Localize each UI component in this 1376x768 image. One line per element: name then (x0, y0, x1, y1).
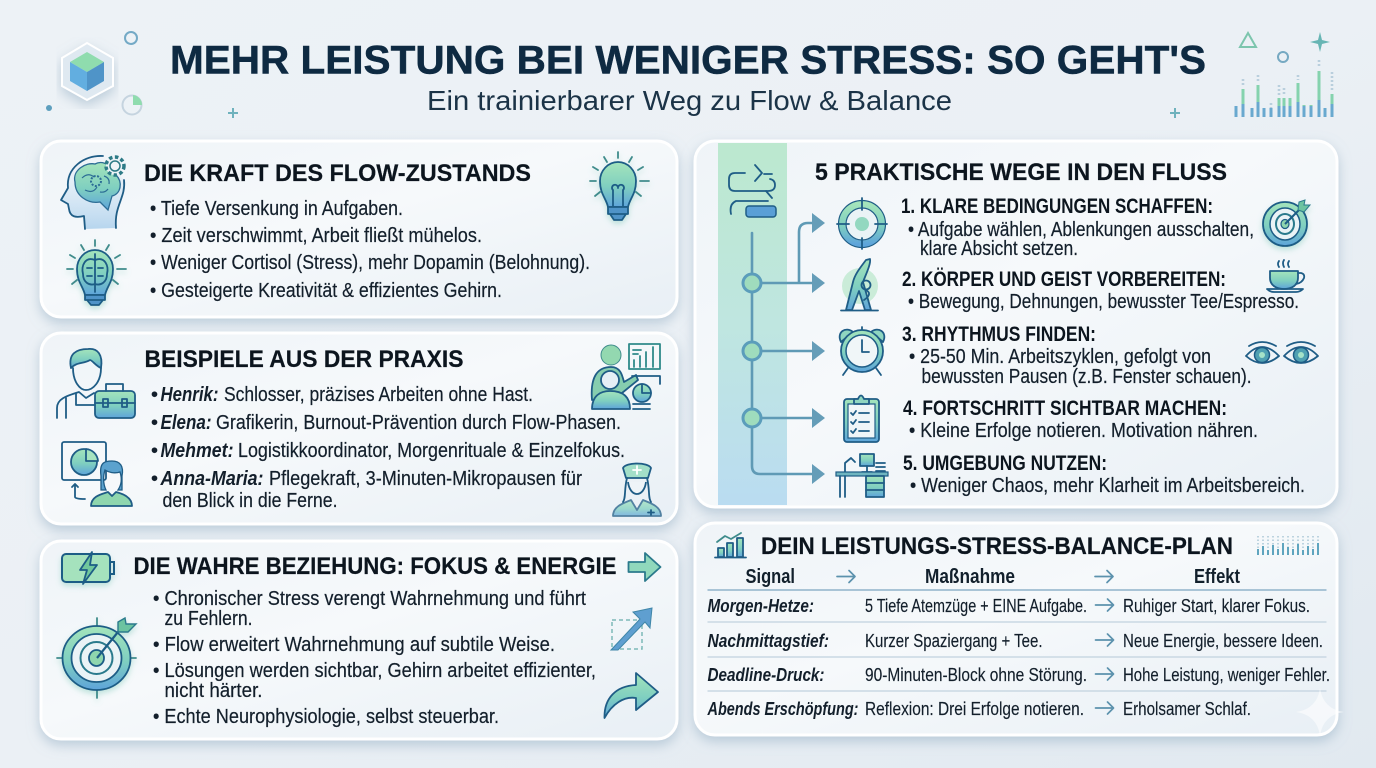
bullet list: • Gesteigerte Kreativität & effizientes Gehirn. (150, 280, 502, 302)
heading: 5 PRAKTISCHE WEGE IN DEN FLUSS (815, 159, 1227, 186)
step 4 (844, 396, 1258, 442)
examples list: • (151, 440, 158, 462)
heading: DIE WAHRE BEZIEHUNG: FOKUS & ENERGIE (134, 553, 616, 580)
bullet list: • Weniger Cortisol (Stress), mehr Dopamin (Belohnung). (150, 252, 590, 274)
icon: curved arrow (604, 673, 658, 718)
heading: DEIN LEISTUNGS-STRESS-BALANCE-PLAN (761, 533, 1233, 560)
panel: Die wahre Beziehung (41, 541, 677, 739)
icon: teacher with charts (592, 344, 660, 409)
row: Deadline-Druck: 90-Minuten-Block ohne Störung. (865, 664, 1087, 685)
subtitle: Ein trainierbarer Weg zu Flow & Balance (427, 85, 952, 116)
examples list: Mehmet: (160, 440, 234, 462)
panel: Beispiele aus der Praxis (41, 333, 677, 524)
examples list: Pflegekraft, 3-Minuten-Mikropausen für (269, 468, 582, 490)
panel: Balance-Plan (695, 523, 1337, 735)
row: Morgen-Hetze: 5 Tiefe Atemzüge + EINE Aufgabe. (865, 595, 1087, 616)
bullet list: • Zeit verschwimmt, Arbeit fließt mühelos. (150, 225, 482, 247)
icon: dart target (1263, 200, 1310, 246)
icon: tea cup (1267, 260, 1304, 292)
icon: light bulb (590, 152, 649, 220)
icon: growth chart (715, 533, 746, 558)
examples list: Henrik: (160, 384, 218, 406)
row: Abends Erschöpfung (707, 698, 1251, 719)
step 3: 3. RHYTHMUS FINDEN: (902, 323, 1096, 346)
step 4: • Kleine Erfolge notieren. Motivation nähren. (909, 420, 1258, 442)
step 3: bewussten Pausen (z.B. Fenster schauen). (922, 366, 1252, 388)
step 5 (836, 452, 1305, 497)
icon: arrow right (628, 553, 660, 581)
side strip (718, 143, 787, 505)
icon: diagonal arrow (611, 608, 652, 650)
step 3 (840, 323, 1318, 388)
bullet list (150, 198, 590, 302)
table header (746, 566, 1240, 588)
heading: BEISPIELE AUS DER PRAXIS (144, 346, 464, 373)
examples list: Elena: (160, 412, 212, 434)
icon: stretching person (841, 259, 878, 310)
row: Nachmittagstief: Nachmittagstief: (708, 630, 829, 651)
heading: DIE KRAFT DES FLOW-ZUSTANDS (144, 160, 531, 187)
row: Deadline-Druck: Hohe Leistung, weniger Fehler. (1123, 664, 1330, 685)
header decoration: left (46, 32, 238, 118)
row: Nachmittagstief (708, 630, 1323, 651)
flow connector (743, 213, 825, 484)
bullet list: zu Fehlern. (164, 608, 252, 630)
examples list: • (151, 468, 158, 490)
icon: hexagon cube (62, 43, 113, 100)
icon: process flow (729, 165, 776, 217)
row: Deadline-Druck: Deadline-Druck: (708, 664, 824, 685)
icon: clipboard checklist (844, 396, 879, 442)
row: Nachmittagstief: Neue Energie, bessere Ideen. (1123, 630, 1323, 651)
icon: craftsman with toolbox (57, 349, 135, 418)
bullet list (153, 588, 596, 728)
examples list: Grafikerin, Burnout-Prävention durch Flow-Phasen. (216, 412, 621, 434)
table header: Maßnahme (925, 566, 1015, 588)
bullet list: nicht härter. (164, 680, 262, 702)
icon: person with pie chart board (62, 442, 132, 506)
bullet list: • Flow erweitert Wahrnehmung auf subtile Weise. (153, 634, 555, 656)
examples list: den Blick in die Ferne. (162, 490, 338, 512)
bullet list: • Echte Neurophysiologie, selbst steuerbar. (153, 706, 499, 728)
title: MEHR LEISTUNG BEI WENIGER STRESS: SO GEHT'S (170, 38, 1206, 82)
step 2: • Bewegung, Dehnungen, bewusster Tee/Espresso. (908, 291, 1299, 313)
step 1: 1. KLARE BEDINGUNGEN SCHAFFEN: (901, 195, 1213, 218)
examples list (151, 384, 625, 512)
row: Deadline-Druck (708, 664, 1330, 685)
row: Abends Erschöpfung: Abends Erschöpfung: (707, 698, 858, 719)
icon: desk (836, 454, 888, 497)
row: Abends Erschöpfung: Reflexion: Drei Erfolge notieren. (865, 698, 1084, 719)
icon: eyes (1246, 342, 1318, 363)
step 2: 2. KÖRPER UND GEIST VORBEREITEN: (902, 268, 1226, 291)
row: Morgen-Hetze (708, 595, 1310, 616)
row: Abends Erschöpfung: Erholsamer Schlaf. (1123, 698, 1251, 719)
icon: battery (62, 552, 114, 584)
bullet list: • Chronischer Stress verengt Wahrnehmung und führt (153, 588, 586, 610)
icon: nurse (613, 464, 661, 516)
bullet list: • Tiefe Versenkung in Aufgaben. (150, 198, 403, 220)
icon: alarm clock (840, 327, 884, 375)
row: Nachmittagstief: Kurzer Spaziergang + Tee. (865, 630, 1042, 651)
bullet list: • Lösungen werden sichtbar, Gehirn arbeitet effizienter, (153, 660, 596, 682)
sparkle (1296, 688, 1344, 736)
step 5: • Weniger Chaos, mehr Klarheit im Arbeitsbereich. (910, 475, 1305, 497)
examples list: • (151, 384, 158, 406)
panel: 5 praktische Wege (695, 141, 1337, 507)
bar chart decoration (1236, 60, 1332, 117)
examples list: Logistikkoordinator, Morgenrituale & Einzelfokus. (238, 440, 625, 462)
step 5: 5. UMGEBUNG NUTZEN: (903, 452, 1107, 475)
step 1: klare Absicht setzen. (920, 238, 1078, 260)
icon: target with dart (57, 618, 136, 698)
step 1: • Aufgabe wählen, Ablenkungen ausschalten, (908, 219, 1254, 241)
examples list: Anna-Maria: (160, 468, 264, 490)
examples list: Schlosser, präzises Arbeiten ohne Hast. (224, 384, 533, 406)
icon: crosshair (837, 198, 887, 249)
step 2 (841, 259, 1304, 313)
step 1 (837, 195, 1310, 260)
icon: head with brain and gears (61, 156, 124, 229)
header decoration: right (1170, 32, 1332, 118)
table header: Effekt (1194, 566, 1240, 588)
icon: mini bars (1258, 534, 1318, 555)
examples list: • (151, 412, 158, 434)
panel: Die Kraft des Flow-Zustands (41, 141, 677, 317)
step 3: • 25-50 Min. Arbeitszyklen, gefolgt von (909, 346, 1211, 368)
table header: Signal (746, 566, 795, 588)
row: Morgen-Hetze: Morgen-Hetze: (708, 595, 814, 616)
step 4: 4. FORTSCHRITT SICHTBAR MACHEN: (903, 397, 1227, 420)
row: Morgen-Hetze: Ruhiger Start, klarer Fokus. (1123, 595, 1310, 616)
icon: bulb with brain (67, 240, 126, 305)
